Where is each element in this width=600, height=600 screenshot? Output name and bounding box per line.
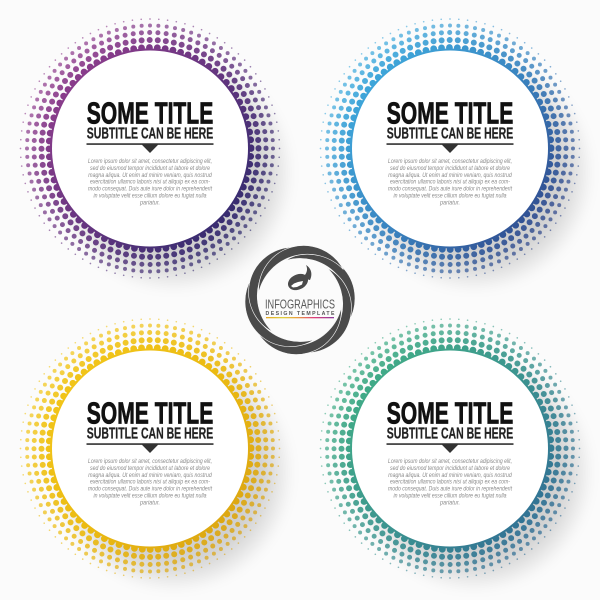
body text: exercitation ullamco laboris nisi ut aliquip ex ea com- — [390, 479, 510, 486]
panel: yellow circle — [20, 319, 294, 592]
heading: SOME TITLE — [387, 96, 513, 130]
drop shadow — [354, 52, 594, 292]
body text: Lorem ipsum dolor sit amet, consectetur adipiscing elit, — [388, 158, 512, 165]
body text: in voluptate velit esse cillum dolore eu fugiat nulla — [94, 192, 207, 199]
heading — [87, 96, 213, 142]
body text: modo consequat. Duis aute irure dolor in reprehenderit — [88, 186, 212, 192]
body text: in voluptate velit esse cillum dolore eu fugiat nulla — [394, 492, 507, 499]
logo title: INFOGRAPHICS — [265, 297, 335, 312]
body text — [88, 458, 212, 506]
body text: Lorem ipsum dolor sit amet, consectetur adipiscing elit, — [88, 458, 212, 465]
body text — [388, 158, 512, 206]
panel: green circle — [320, 319, 594, 592]
halftone dots — [20, 319, 280, 578]
icon: emblem — [285, 265, 311, 293]
body text: magna aliqua. Ut enim ad minim veniam, quis nostrud — [388, 472, 512, 479]
halftone dots — [20, 19, 280, 278]
heading: SUBTITLE CAN BE HERE — [87, 426, 213, 442]
heading — [387, 396, 513, 442]
body text: sed do eiusmod tempor incididunt ut labore et dolore — [90, 465, 210, 472]
center logo — [230, 228, 370, 372]
panel: purple circle — [20, 19, 294, 292]
drop shadow — [54, 52, 294, 292]
heading: SUBTITLE CAN BE HERE — [387, 126, 513, 142]
drop shadow — [354, 352, 594, 592]
divider with pointer — [86, 143, 214, 153]
body text: in voluptate velit esse cillum dolore eu fugiat nulla — [94, 492, 207, 499]
body text: modo consequat. Duis aute irure dolor in reprehenderit — [388, 486, 512, 492]
body text: magna aliqua. Ut enim ad minim veniam, quis nostrud — [88, 172, 212, 179]
body text: pariatur. — [439, 199, 460, 206]
heading — [87, 396, 213, 442]
body text — [88, 158, 212, 206]
body text: exercitation ullamco laboris nisi ut aliquip ex ea com- — [90, 179, 210, 186]
white disc — [52, 50, 248, 246]
body text — [388, 458, 512, 506]
halftone dots — [320, 19, 580, 278]
white disc — [352, 50, 548, 246]
body text: pariatur. — [139, 199, 160, 206]
white disc — [52, 350, 248, 546]
body text: pariatur. — [439, 499, 460, 506]
divider with pointer — [86, 443, 214, 453]
divider with pointer — [386, 143, 514, 153]
rainbow line — [266, 317, 334, 318]
body text: sed do eiusmod tempor incididunt ut labore et dolore — [390, 165, 510, 172]
body text: Lorem ipsum dolor sit amet, consectetur adipiscing elit, — [388, 458, 512, 465]
heading: SUBTITLE CAN BE HERE — [387, 426, 513, 442]
halftone dots — [320, 319, 580, 578]
body text: in voluptate velit esse cillum dolore eu fugiat nulla — [394, 192, 507, 199]
panel: blue circle — [320, 19, 594, 292]
aperture swirl ring — [230, 228, 370, 372]
heading: SOME TITLE — [87, 396, 213, 430]
body text: sed do eiusmod tempor incididunt ut labore et dolore — [90, 165, 210, 172]
body text: exercitation ullamco laboris nisi ut aliquip ex ea com- — [390, 179, 510, 186]
body text: exercitation ullamco laboris nisi ut aliquip ex ea com- — [90, 479, 210, 486]
heading — [387, 96, 513, 142]
body text: sed do eiusmod tempor incididunt ut labore et dolore — [390, 465, 510, 472]
body text: magna aliqua. Ut enim ad minim veniam, quis nostrud — [388, 172, 512, 179]
divider with pointer — [386, 443, 514, 453]
body text: Lorem ipsum dolor sit amet, consectetur adipiscing elit, — [88, 158, 212, 165]
body text: modo consequat. Duis aute irure dolor in reprehenderit — [88, 486, 212, 492]
white disc — [352, 350, 548, 546]
heading: SOME TITLE — [387, 396, 513, 430]
heading: SOME TITLE — [87, 96, 213, 130]
logo subtitle: DESIGN TEMPLATE — [266, 311, 335, 317]
body text: modo consequat. Duis aute irure dolor in reprehenderit — [388, 186, 512, 192]
body text: magna aliqua. Ut enim ad minim veniam, quis nostrud — [88, 472, 212, 479]
body text: pariatur. — [139, 499, 160, 506]
heading: SUBTITLE CAN BE HERE — [87, 126, 213, 142]
drop shadow — [54, 352, 294, 592]
